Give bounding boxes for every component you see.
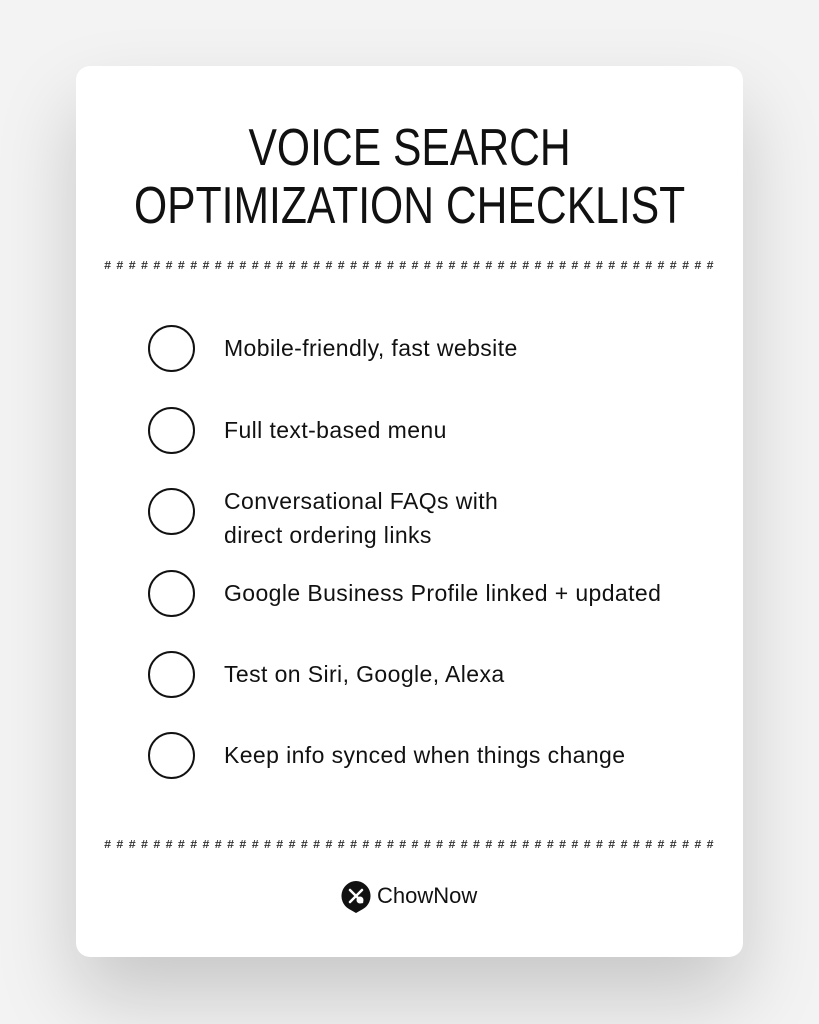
divider top: # bbox=[473, 259, 480, 273]
divider top: # bbox=[153, 259, 160, 273]
divider bottom: # bbox=[239, 838, 246, 852]
checklist item 5 bbox=[148, 651, 505, 698]
divider top: # bbox=[596, 259, 603, 273]
divider bottom: # bbox=[252, 838, 259, 852]
divider top: # bbox=[608, 259, 615, 273]
checklist item 1 bbox=[148, 325, 518, 372]
text: Full text-based menu bbox=[224, 417, 447, 443]
divider top: # bbox=[461, 259, 468, 273]
divider top bbox=[104, 259, 714, 273]
divider top: # bbox=[129, 259, 136, 273]
divider top: # bbox=[424, 259, 431, 273]
divider bottom: # bbox=[141, 838, 148, 852]
icon: chownow bbox=[341, 881, 371, 913]
divider bottom: # bbox=[153, 838, 160, 852]
divider bottom: # bbox=[620, 838, 628, 852]
divider top: # bbox=[657, 259, 665, 273]
divider bottom: # bbox=[670, 838, 677, 852]
title bbox=[134, 119, 685, 235]
divider bottom: # bbox=[657, 838, 665, 852]
divider bottom: # bbox=[190, 838, 197, 852]
divider bottom: # bbox=[424, 838, 431, 852]
divider bottom: # bbox=[338, 838, 345, 852]
title: OPTIMIZATION CHECKLIST bbox=[134, 177, 685, 235]
divider top: # bbox=[571, 259, 578, 273]
divider bottom: # bbox=[411, 838, 419, 852]
divider bottom bbox=[104, 838, 714, 852]
divider top: # bbox=[411, 259, 419, 273]
divider top: # bbox=[387, 259, 394, 273]
divider top: # bbox=[116, 259, 124, 273]
text: direct ordering links bbox=[224, 522, 432, 548]
divider top: # bbox=[276, 259, 283, 273]
divider top: # bbox=[362, 259, 369, 273]
divider bottom: # bbox=[227, 838, 234, 852]
divider bottom: # bbox=[461, 838, 468, 852]
divider top: # bbox=[227, 259, 234, 273]
divider bottom: # bbox=[104, 838, 111, 852]
divider bottom: # bbox=[510, 838, 517, 852]
divider top: # bbox=[178, 259, 185, 273]
divider bottom: # bbox=[362, 838, 369, 852]
divider bottom: # bbox=[694, 838, 701, 852]
checklist item 6 bbox=[148, 732, 625, 779]
divider top: # bbox=[436, 259, 443, 273]
divider top: # bbox=[670, 259, 677, 273]
logo bbox=[341, 881, 478, 913]
divider top: # bbox=[104, 259, 111, 273]
divider bottom: # bbox=[584, 838, 591, 852]
divider bottom: # bbox=[215, 838, 222, 852]
divider bottom: # bbox=[264, 838, 271, 852]
text: Test on Siri, Google, Alexa bbox=[224, 661, 505, 687]
divider top: # bbox=[288, 259, 296, 273]
divider top: # bbox=[325, 259, 333, 273]
divider top: # bbox=[313, 259, 320, 273]
divider top: # bbox=[399, 259, 406, 273]
divider top: # bbox=[252, 259, 259, 273]
divider bottom: # bbox=[165, 838, 173, 852]
checklist item 2 bbox=[148, 407, 447, 454]
divider bottom: # bbox=[473, 838, 480, 852]
divider bottom: # bbox=[325, 838, 333, 852]
divider top: # bbox=[620, 259, 628, 273]
title: VOICE SEARCH bbox=[248, 119, 571, 177]
divider bottom: # bbox=[633, 838, 640, 852]
divider top: # bbox=[510, 259, 517, 273]
divider bottom: # bbox=[682, 838, 689, 852]
brand name: ChowNow bbox=[377, 883, 477, 908]
divider bottom: # bbox=[350, 838, 357, 852]
divider top: # bbox=[498, 259, 505, 273]
divider top: # bbox=[375, 259, 382, 273]
divider top: # bbox=[239, 259, 246, 273]
text: Mobile-friendly, fast website bbox=[224, 335, 518, 361]
divider bottom: # bbox=[178, 838, 185, 852]
divider top: # bbox=[633, 259, 640, 273]
divider top: # bbox=[694, 259, 701, 273]
divider top: # bbox=[645, 259, 652, 273]
divider top: # bbox=[682, 259, 689, 273]
divider top: # bbox=[215, 259, 222, 273]
divider top: # bbox=[301, 259, 308, 273]
divider top: # bbox=[264, 259, 271, 273]
text: Google Business Profile linked + updated bbox=[224, 580, 661, 606]
divider top: # bbox=[202, 259, 210, 273]
divider bottom: # bbox=[288, 838, 296, 852]
divider bottom: # bbox=[571, 838, 578, 852]
text: Keep info synced when things change bbox=[224, 742, 625, 768]
divider bottom: # bbox=[559, 838, 566, 852]
text: Conversational FAQs with bbox=[224, 488, 498, 514]
divider bottom: # bbox=[645, 838, 652, 852]
divider top: # bbox=[350, 259, 357, 273]
divider bottom: # bbox=[399, 838, 406, 852]
divider bottom: # bbox=[116, 838, 124, 852]
divider top: # bbox=[190, 259, 197, 273]
divider top: # bbox=[165, 259, 173, 273]
divider top: # bbox=[559, 259, 566, 273]
divider bottom: # bbox=[448, 838, 456, 852]
divider bottom: # bbox=[276, 838, 283, 852]
divider bottom: # bbox=[301, 838, 308, 852]
divider bottom: # bbox=[596, 838, 603, 852]
divider bottom: # bbox=[522, 838, 529, 852]
divider top: # bbox=[534, 259, 542, 273]
divider top: # bbox=[448, 259, 456, 273]
divider bottom: # bbox=[202, 838, 210, 852]
divider bottom: # bbox=[387, 838, 394, 852]
divider bottom: # bbox=[313, 838, 320, 852]
divider bottom: # bbox=[534, 838, 542, 852]
divider top: # bbox=[141, 259, 148, 273]
divider top: # bbox=[522, 259, 529, 273]
divider bottom: # bbox=[707, 838, 714, 852]
checklist item 4 bbox=[148, 570, 661, 617]
divider top: # bbox=[338, 259, 345, 273]
divider bottom: # bbox=[608, 838, 615, 852]
divider bottom: # bbox=[129, 838, 136, 852]
card bbox=[76, 66, 743, 957]
divider top: # bbox=[485, 259, 492, 273]
divider top: # bbox=[707, 259, 714, 273]
divider bottom: # bbox=[436, 838, 443, 852]
divider bottom: # bbox=[498, 838, 505, 852]
checklist item 3 bbox=[148, 488, 498, 548]
divider bottom: # bbox=[375, 838, 382, 852]
divider bottom: # bbox=[485, 838, 492, 852]
divider bottom: # bbox=[547, 838, 554, 852]
divider top: # bbox=[584, 259, 591, 273]
divider top: # bbox=[547, 259, 554, 273]
